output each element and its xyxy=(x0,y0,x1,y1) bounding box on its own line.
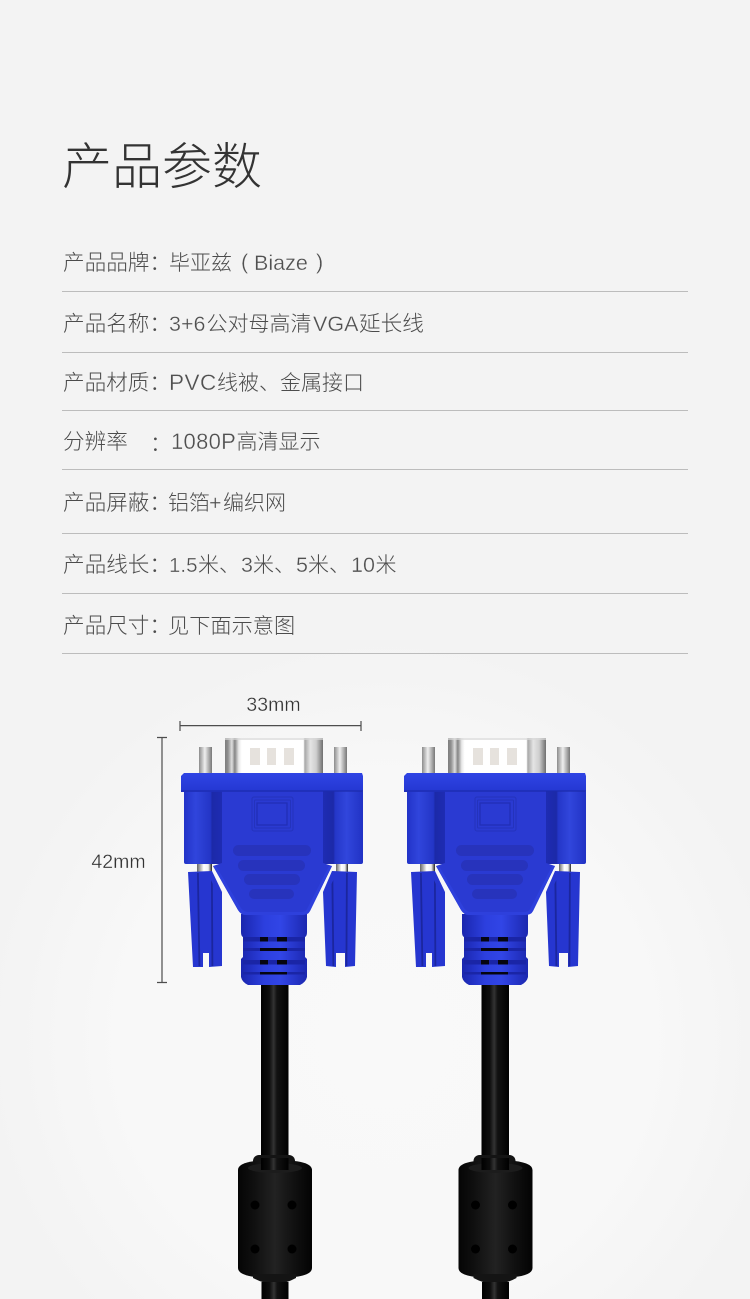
left VGA connector xyxy=(181,738,363,985)
spec row: resolution xyxy=(63,429,320,456)
spec row: material xyxy=(63,370,364,395)
dimension: height 42mm: 42mm xyxy=(91,851,146,873)
title: 产品参数 xyxy=(62,139,262,195)
spec row: name: 3+6 xyxy=(169,312,206,336)
spec row: name: 延长线 xyxy=(359,311,424,336)
right cable and ferrite xyxy=(458,985,532,1299)
spec row: name: 产品名称： xyxy=(63,311,171,336)
spec row: size: 见下面示意图 xyxy=(168,614,295,638)
spec row: length: 米、 xyxy=(253,554,295,577)
spec row: length: 3 xyxy=(241,553,253,577)
spec row: brand: Biaze xyxy=(254,251,308,275)
spec row: length: 米、 xyxy=(198,554,240,577)
spec row: resolution: 高清显示 xyxy=(236,431,320,454)
spec row: shielding: + xyxy=(209,491,222,515)
spec row: shielding: 铝箔 xyxy=(168,492,210,515)
spec row: brand: 毕亚兹 xyxy=(169,252,232,275)
dimension: width 33mm xyxy=(180,694,361,731)
right VGA connector xyxy=(404,738,586,985)
spec row: material: PVC xyxy=(169,370,217,395)
spec row: brand: ) xyxy=(316,250,323,274)
spec row: name: 公对母高清 xyxy=(206,313,312,336)
spec row: shielding xyxy=(63,490,286,515)
spec row: brand xyxy=(63,250,323,275)
spec row: material: 线被、 xyxy=(217,372,280,395)
spec row: shielding: 编织网 xyxy=(223,492,286,515)
spec row: name: VGA xyxy=(313,312,359,336)
spec row: length: 10 xyxy=(351,553,375,577)
spec row: length: 5 xyxy=(296,553,308,577)
dimension: width 33mm: 33mm xyxy=(246,694,301,716)
spec row: length: 1.5 xyxy=(169,554,198,577)
spec row: resolution: 1080P xyxy=(171,429,236,454)
spec row: brand: ( xyxy=(241,250,249,274)
spec row: brand: 产品品牌： xyxy=(63,250,171,275)
spec row: resolution: ： xyxy=(150,431,172,456)
spec row: size: 产品尺寸： xyxy=(63,613,171,638)
spec row: material: 产品材质： xyxy=(63,370,171,395)
spec row: length: 米 xyxy=(376,554,396,577)
spec row: name xyxy=(63,311,424,336)
spec row: length xyxy=(63,552,396,577)
spec row: material: 金属接口 xyxy=(280,372,364,395)
spec row: size xyxy=(63,613,295,638)
spec row: resolution: 分辨率 xyxy=(63,429,128,454)
spec row: length: 米、 xyxy=(308,554,350,577)
left cable and ferrite xyxy=(238,985,312,1299)
spec row: shielding: 产品屏蔽： xyxy=(63,490,171,515)
dimension: height 42mm xyxy=(91,737,167,982)
spec row: length: 产品线长： xyxy=(63,552,171,577)
